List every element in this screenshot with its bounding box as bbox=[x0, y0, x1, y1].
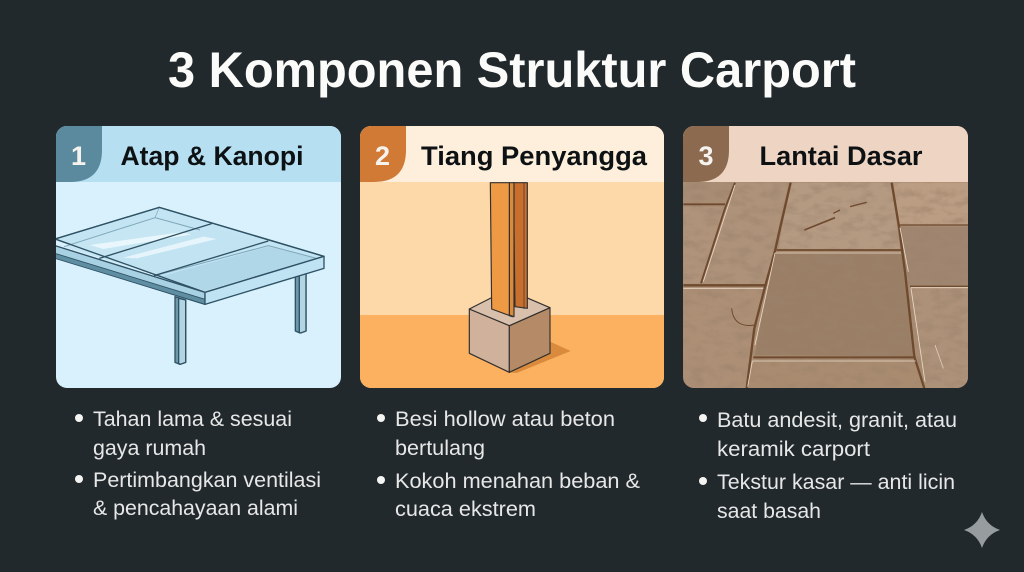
badge 3 bbox=[683, 126, 729, 182]
heading 1: Atap & Kanopi bbox=[120, 141, 304, 171]
badge 1 bbox=[56, 126, 102, 182]
text block: bullets 3: saat basah bbox=[717, 500, 821, 523]
text block: bullets 1: & pencahayaan alami bbox=[93, 497, 298, 520]
text block: bullets 1: gaya rumah bbox=[93, 437, 206, 460]
text block: bullets 2: bertulang bbox=[395, 437, 485, 460]
text block: bullets 3: Batu andesit, granit, atau bbox=[717, 409, 957, 432]
header band 1 bbox=[56, 126, 341, 182]
text block: bullets 3 bbox=[699, 409, 957, 523]
text block: bullets 1: Pertimbangkan ventilasi bbox=[93, 469, 321, 492]
text block: bullets 2: cuaca ekstrem bbox=[395, 498, 536, 521]
heading 3: Lantai Dasar bbox=[760, 141, 923, 171]
icon: sparkle bbox=[964, 512, 1000, 548]
text block: bullets 2 bbox=[377, 408, 640, 521]
panel: lantai dasar bbox=[683, 126, 970, 389]
badge 1: 1 bbox=[71, 141, 86, 171]
title: 3 Komponen Struktur Carport bbox=[168, 42, 856, 98]
badge 2 bbox=[360, 126, 406, 182]
text block: bullets 3: keramik carport bbox=[717, 438, 870, 461]
stone floor bbox=[683, 183, 970, 389]
heading 2: Tiang Penyangga bbox=[421, 141, 648, 171]
text block: bullets 3: Tekstur kasar — anti licin bbox=[717, 471, 955, 494]
icon: post on concrete footing bbox=[469, 183, 571, 373]
icon: carport roof bbox=[55, 207, 324, 364]
badge 2: 2 bbox=[375, 141, 390, 171]
text block: bullets 1 bbox=[75, 408, 321, 520]
panel: tiang penyangga bbox=[360, 126, 664, 388]
ground bbox=[360, 315, 664, 388]
badge 3: 3 bbox=[698, 141, 714, 171]
text block: bullets 1: Tahan lama & sesuai bbox=[93, 408, 292, 431]
text block: bullets 2: Kokoh menahan beban & bbox=[395, 470, 640, 493]
header band 2 bbox=[360, 126, 664, 182]
text block: bullets 2: Besi hollow atau beton bbox=[395, 408, 615, 431]
header band 3 bbox=[683, 126, 968, 182]
panel: atap dan kanopi bbox=[55, 126, 341, 388]
